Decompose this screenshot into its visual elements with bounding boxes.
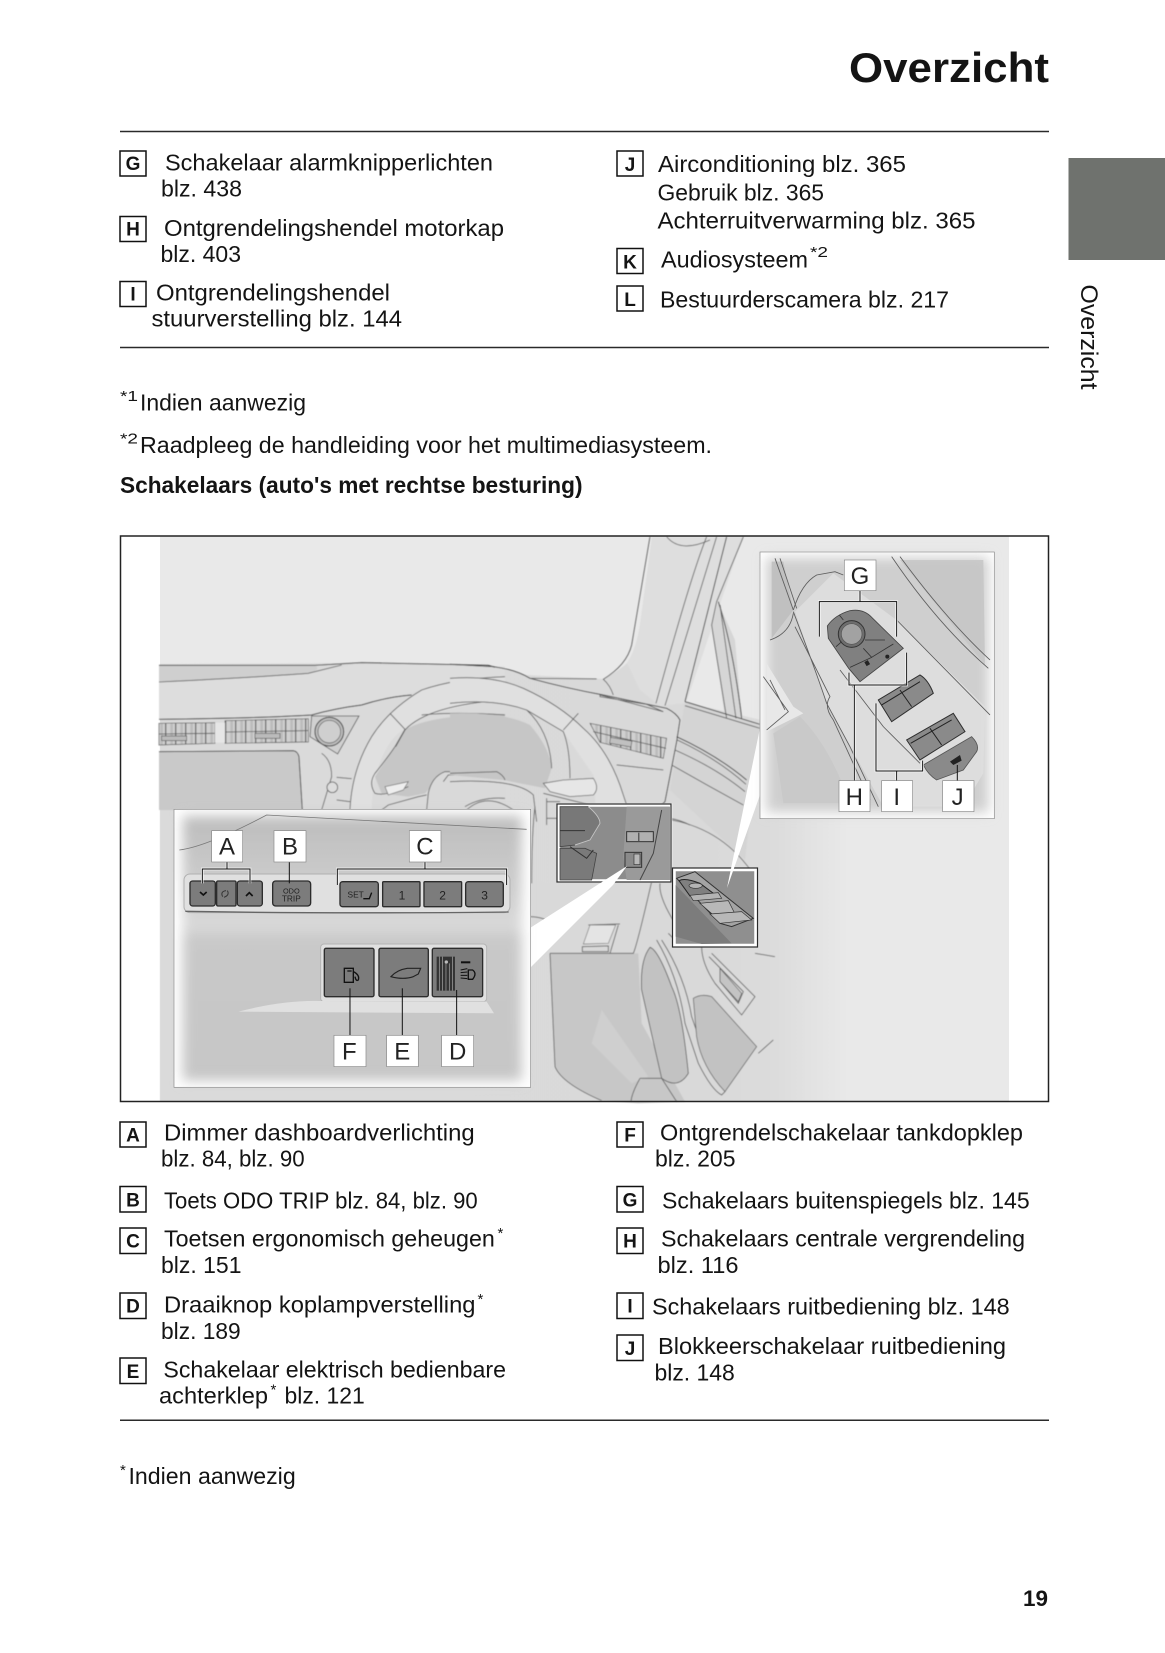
label I [876,703,923,812]
item F: F [624,1126,636,1146]
label A [202,831,250,883]
label J: J [952,784,964,811]
item B: Toets ODO TRIP blz. 84, blz. 90 [164,1187,478,1213]
item J [617,151,976,234]
item L: L [624,290,636,311]
item E: * [270,1382,276,1398]
item F: Ontgrendelschakelaar tankdopklep [660,1120,1023,1146]
label D [442,990,474,1067]
scene background [160,536,1009,1101]
legend bottom right [617,1120,1030,1385]
item H: blz. 116 [658,1252,738,1278]
diagram: dashboard illustration [159,536,1009,1103]
item E: E [127,1362,139,1383]
item C: C [126,1232,140,1252]
item K: K [623,252,637,274]
mirror switch cluster [827,610,903,682]
label B: B [282,834,298,861]
item J: J [625,1339,635,1360]
item D: * [478,1291,484,1308]
window switches [878,675,978,780]
highlight: door switches [672,868,758,947]
label F [334,988,366,1067]
item G: G [623,1190,637,1212]
label J [943,765,974,812]
footnote 1: *1 [120,388,138,405]
item D: D [126,1296,140,1318]
legend bottom left [120,1120,506,1408]
item J: Blokkeerschakelaar ruitbediening [658,1333,1006,1359]
left dashboard detail [159,663,505,810]
central dashboard and pillar detail [450,537,760,825]
item J: Achterruitverwarming blz. 365 [658,208,976,234]
footnote 2: *2 [120,430,138,448]
section heading: Schakelaars (auto's met rechtse besturing) [120,472,582,498]
item H: H [126,220,140,240]
legend top left [120,150,504,332]
inset: door switches [760,552,994,819]
legend top right [617,151,976,312]
item A: blz. 84, blz. 90 [161,1145,305,1171]
item F [617,1120,1023,1171]
callout pointer: left inset [530,866,627,968]
item K: *2 [810,244,828,261]
item J: Airconditioning blz. 365 [658,151,906,177]
footnote: * [120,1462,126,1479]
item G: blz. 438 [161,176,242,202]
dashboard and pillars [159,537,850,1103]
item J: Gebruik blz. 365 [658,179,824,205]
switch panel upper [184,874,510,913]
item K [617,244,828,274]
item G: Schakelaar alarmknipperlichten [165,150,493,176]
item C: * [498,1225,504,1242]
label F: F [342,1038,357,1065]
item G [120,150,493,202]
item I: Schakelaars ruitbediening blz. 148 [652,1294,1010,1320]
item H: H [623,1232,637,1252]
label G: G [851,563,869,590]
page number: 19 [1023,1586,1048,1611]
diagram frame [120,536,1048,1102]
switch panel upper: SET [348,890,364,900]
item H: blz. 403 [160,241,241,267]
item A [120,1120,475,1171]
item H: Schakelaars centrale vergrendeling [661,1226,1025,1252]
item B: B [126,1190,140,1212]
item G: G [126,154,140,175]
label E [387,988,418,1067]
item I: stuurverstelling blz. 144 [152,306,402,332]
item C [120,1225,504,1278]
item E: blz. 121 [284,1382,365,1408]
item F: blz. 205 [655,1145,736,1171]
switch panel upper: TRIP [282,893,301,903]
item E: Schakelaar elektrisch bedienbare [163,1357,506,1383]
switch panel upper: 2 [439,888,446,902]
item D: blz. 189 [161,1318,241,1344]
switch panel lower [238,944,494,1013]
item G: Schakelaars buitenspiegels blz. 145 [662,1187,1030,1213]
label I: I [893,784,900,811]
label H [839,653,907,812]
item J [617,1333,1006,1385]
footnote 1: Indien aanwezig [140,390,306,416]
item I: Ontgrendelingshendel [156,280,390,306]
label E: E [394,1038,410,1065]
item J: J [625,155,635,176]
label C [337,831,507,885]
switch panel upper: 3 [481,888,488,902]
item C: Toetsen ergonomisch geheugen [164,1226,495,1252]
item I [120,280,402,332]
item E [120,1357,506,1408]
item C: blz. 151 [161,1252,242,1278]
item L: Bestuurderscamera blz. 217 [660,286,949,312]
switch panel upper: ODO [283,886,300,895]
side label: Overzicht [1075,284,1102,390]
item H [120,215,504,267]
item K: Audiosysteem [661,246,808,272]
label B [274,831,306,883]
item I: I [130,284,136,306]
item D: Draaiknop koplampverstelling [164,1292,476,1318]
lower console and door detail [530,807,775,1103]
item I: I [627,1296,633,1318]
footnote: Indien aanwezig [128,1463,296,1489]
highlight: steering column switches [557,804,671,882]
item H [617,1226,1025,1278]
item A: A [126,1126,140,1146]
switch panel upper: 1 [399,888,406,902]
footnote 2: Raadpleeg de handleiding voor het multimediasysteem. [140,432,712,458]
title: Overzicht [849,44,1049,91]
item A: Dimmer dashboardverlichting [164,1120,475,1146]
label A: A [219,834,235,861]
item J: blz. 148 [654,1359,735,1385]
item D [120,1291,484,1344]
item H: Ontgrendelingshendel motorkap [164,215,504,241]
label H: H [846,784,863,811]
callout pointer: right inset [727,728,760,888]
label D: D [449,1038,466,1065]
label C: C [416,834,434,861]
item E: achterklep [159,1382,268,1408]
section tab [1068,158,1165,260]
inset: dashboard switches [174,809,531,1087]
label G [819,560,897,637]
